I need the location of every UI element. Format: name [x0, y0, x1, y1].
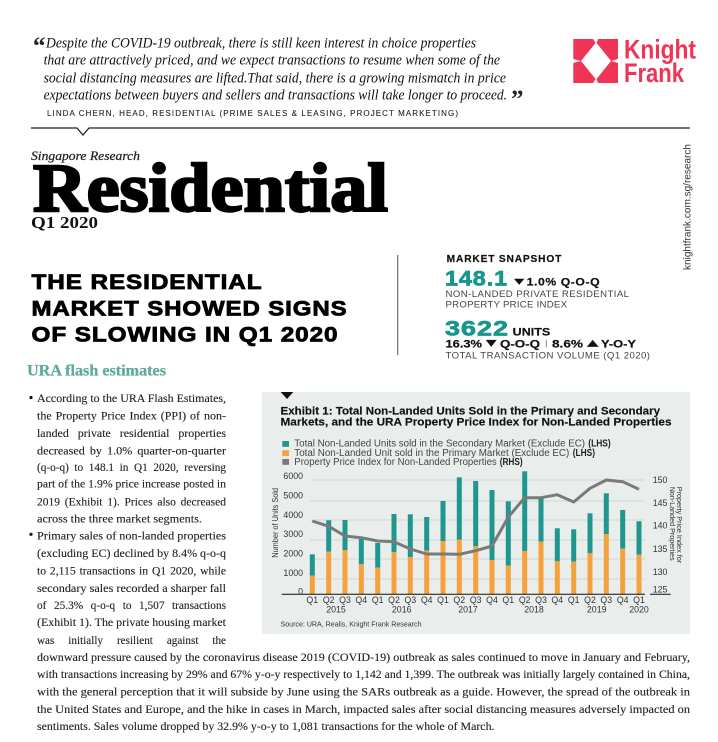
quote block: expectations between buyers and sellers and transactions will take longer to proceed. — [44, 87, 507, 103]
source note: Source: URA, Realis, Knight Frank Research — [280, 619, 422, 628]
price index stat: 148.1 — [445, 268, 508, 291]
right axis labels: 130 — [653, 567, 667, 577]
chart title: Exhibit 1: Total Non-Landed Units Sold in the Primary and Secondary — [280, 405, 661, 417]
transactions change: 8.6% — [552, 338, 584, 350]
website vertical: knightfrank.com.sg/research — [682, 144, 694, 270]
panel: exhibit 1 chart — [262, 392, 690, 634]
transactions change: Y-O-Y — [601, 338, 636, 350]
headline: MARKET SHOWED SIGNS — [32, 297, 348, 321]
legend: Property Price Index for Non-Landed Properties — [294, 457, 497, 468]
year labels: 2018 — [524, 604, 544, 614]
left axis labels: 3000 — [283, 529, 303, 539]
price index caption: NON-LANDED PRIVATE RESIDENTIAL — [446, 289, 630, 300]
quarter labels: Q2 — [388, 595, 400, 605]
transactions change: Q-O-Q — [500, 338, 540, 350]
market snapshot panel — [445, 254, 650, 362]
logo: Knight Frank: Knight — [624, 34, 696, 64]
legend: (LHS) — [573, 448, 595, 459]
right axis labels: 135 — [653, 544, 667, 554]
left axis labels: 4000 — [283, 510, 303, 520]
bars: secondary market — [310, 471, 642, 576]
body text: first bullet: 2019 (Exhibit 1). Prices also decreased — [37, 494, 226, 508]
year labels — [326, 604, 649, 614]
quarter labels: Q1 — [437, 595, 449, 605]
quote attribution: LINDA CHERN, HEAD, RESIDENTIAL (PRIME SALES & LEASING, PROJECT MARKETING) — [47, 109, 458, 118]
exhibit marker triangle — [281, 392, 293, 399]
bars: primary market — [310, 534, 642, 594]
chart title: Markets, and the URA Property Price Index for Non-Landed Properties — [280, 417, 672, 429]
year labels: 2019 — [587, 604, 607, 614]
quarter labels: Q3 — [339, 595, 351, 605]
axis baseline — [282, 593, 671, 595]
legend: (RHS) — [500, 457, 523, 468]
year labels: 2016 — [392, 604, 412, 614]
body text: first bullet: across the three market segments. — [37, 512, 202, 526]
body text: second bullet: (Exhibit 1). The private housing market — [37, 615, 227, 629]
left axis labels: 5000 — [283, 490, 303, 500]
left axis labels: 1000 — [283, 568, 303, 578]
quarter labels: Q4 — [551, 595, 563, 605]
headline — [32, 270, 348, 347]
body text: second bullet: downward pressure caused by the coronavirus disease 2019 (COVID-19) outbreak as sales continued to move in January and February, — [37, 650, 690, 664]
left axis title: Number of Units Sold — [271, 488, 280, 558]
body text: second bullet: sentiments. Sales volume dropped by 32.9% y-o-y to 1,081 transactions for the whole of March. — [37, 719, 494, 733]
right axis labels — [653, 475, 667, 594]
body text: first bullet: part of the 1.9% price increase posted in — [37, 477, 226, 491]
quarter labels: Q1 — [568, 595, 580, 605]
body text: first bullet: landed private residential properties — [37, 426, 226, 440]
quarter labels: Q2 — [584, 595, 596, 605]
headline: OF SLOWING IN Q1 2020 — [32, 323, 338, 347]
transactions stat: 3622 — [445, 318, 509, 341]
legend: Total Non-Landed Unit sold in the Primary Market (Exclude EC) — [294, 448, 569, 459]
quarter labels: Q1 — [306, 595, 318, 605]
body text: first bullet: According to the URA Flash Estimates, — [37, 391, 226, 405]
logo: Knight Frank — [573, 34, 696, 88]
price index line — [312, 480, 639, 554]
right axis title: Non-Landed Properties — [668, 487, 677, 561]
price index caption — [446, 289, 630, 311]
price index caption: PROPERTY PRICE INDEX — [446, 300, 568, 311]
body text: first bullet: decreased by 1.0% quarter-on-quarter — [37, 443, 226, 457]
quote block: social distancing measures are lifted.That said, there is a growing mismatch in price — [44, 71, 506, 87]
legend: (LHS) — [588, 439, 611, 450]
quarter labels — [306, 595, 645, 605]
transactions change — [446, 338, 636, 350]
quarter labels: Q4 — [355, 595, 367, 605]
left axis labels: 6000 — [283, 471, 303, 481]
quarter labels: Q1 — [372, 595, 384, 605]
gridlines — [310, 480, 645, 579]
body text: second bullet: the United States and Europe, and the hike in cases in March, impacted sales after social distancing measures adversely impacted on — [37, 702, 690, 716]
vertical divider — [397, 255, 398, 355]
quarter labels: Q4 — [617, 595, 629, 605]
right axis title — [668, 487, 684, 564]
quarter labels: Q3 — [535, 595, 547, 605]
right axis title: Property Price Index for — [675, 487, 684, 564]
quote block: that are attractively priced, and we expect transactions to resume when some of the — [44, 53, 500, 69]
report label: Singapore Research — [31, 148, 140, 163]
body text: second bullet: was initially resilient against the — [37, 633, 226, 647]
period label: Q1 2020 — [31, 213, 98, 232]
body text: second bullet: Primary sales of non-landed properties — [37, 529, 226, 543]
body text: second bullet: with transactions increasing by 29% and 67% y-o-y respectively to 1,142 and 1,399. The outbreak was initially largely contained in China, — [37, 667, 690, 681]
quarter labels: Q3 — [470, 595, 482, 605]
quarter labels: Q2 — [453, 595, 465, 605]
left axis labels — [283, 471, 303, 596]
body text: first bullet: (q-o-q) to 148.1 in Q1 2020, reversing — [37, 460, 226, 474]
body text: first bullet: the Property Price Index (PPI) of non- — [37, 408, 226, 422]
body text: second bullet: (excluding EC) declined by 8.4% q-o-q — [37, 546, 226, 560]
quarter labels: Q3 — [404, 595, 416, 605]
body text: first bullet — [29, 391, 226, 526]
price index change: 1.0% Q-O-Q — [527, 277, 600, 289]
body text: second bullet: to 2,115 transactions in Q1 2020, while — [37, 564, 226, 578]
snapshot heading: MARKET SNAPSHOT — [447, 254, 562, 265]
quarter labels: Q4 — [421, 595, 433, 605]
logo: Knight Frank: Frank — [624, 58, 685, 88]
quarter labels: Q4 — [486, 595, 498, 605]
left axis labels: 2000 — [283, 548, 303, 558]
year labels: 2017 — [458, 604, 478, 614]
transactions caption: TOTAL TRANSACTION VOLUME (Q1 2020) — [446, 351, 650, 362]
quarter labels: Q1 — [502, 595, 514, 605]
units label: UNITS — [513, 327, 550, 339]
quarter labels: Q1 — [633, 595, 645, 605]
right axis labels: 150 — [653, 475, 667, 485]
right axis labels: 125 — [653, 584, 667, 594]
right axis labels: 140 — [653, 520, 667, 530]
quarter labels: Q3 — [600, 595, 612, 605]
quote block: Despite the COVID-19 outbreak, there is still keen interest in choice properties — [45, 35, 476, 51]
legend: Total Non-Landed Units sold in the Secondary Market (Exclude EC) — [294, 439, 585, 450]
body text: second bullet: with the general perception that it will subside by June using the SARs outbreak as a guide. However, the spread of the outbreak in — [37, 684, 690, 698]
top rule with notch — [31, 128, 690, 135]
quote block — [33, 33, 524, 113]
quarter labels: Q2 — [323, 595, 335, 605]
legend — [282, 439, 611, 468]
body text: second bullet — [29, 529, 690, 733]
right axis labels: 145 — [653, 498, 667, 508]
down arrow — [514, 279, 524, 285]
headline: THE RESIDENTIAL — [32, 270, 262, 294]
year labels: 2020 — [629, 604, 649, 614]
body text: second bullet: of 25.3% q-o-q to 1,507 transactions — [37, 598, 226, 612]
quarter labels: Q2 — [519, 595, 531, 605]
body text: second bullet: secondary sales recorded a sharper fall — [37, 581, 227, 595]
main title: Residential — [33, 150, 388, 226]
year labels: 2015 — [326, 604, 346, 614]
quote block: “ — [33, 33, 46, 60]
chart title — [280, 405, 672, 429]
quote block: ” — [511, 86, 524, 113]
left axis labels: 0 — [298, 586, 303, 596]
section heading: URA flash estimates — [27, 363, 166, 380]
transactions change: 16.3% — [446, 338, 483, 350]
